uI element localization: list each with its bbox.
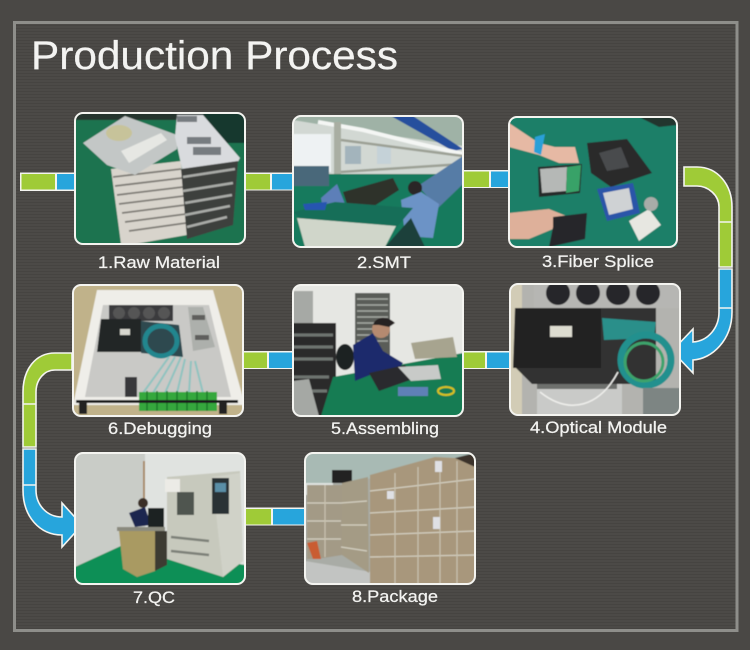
connector: step 6 to step 5 (243, 351, 293, 369)
photo: package (305, 453, 475, 584)
label: step 8: 8.Package (352, 588, 438, 606)
label: step 7: 7.QC (133, 589, 175, 607)
label: step 4: 4.Optical Module (530, 419, 667, 437)
photo: quality control (75, 453, 245, 584)
photo: assembling (293, 285, 463, 416)
connector: step 7 to step 8 (245, 508, 305, 526)
connector: start to step 1 (20, 172, 76, 191)
connector: step 1 to step 2 (245, 172, 293, 190)
label: step 1: 1.Raw Material (98, 254, 220, 272)
photo: fiber splice (509, 117, 677, 247)
photo: SMT line (293, 116, 463, 247)
arrow: step 3 to step 4 (672, 167, 732, 373)
connector: step 5 to step 4 (462, 351, 510, 369)
arrow: step 6 to step 7 (23, 353, 82, 547)
photo: debugging (73, 285, 245, 416)
connector: step 2 to step 3 (463, 170, 509, 188)
photo: optical module (510, 281, 680, 415)
photo: raw material (75, 113, 245, 244)
label: step 2: 2.SMT (357, 254, 411, 272)
label: step 5: 5.Assembling (331, 420, 439, 438)
label: step 3: 3.Fiber Splice (542, 253, 654, 271)
title: Production Process (31, 34, 398, 78)
label: step 6: 6.Debugging (108, 420, 212, 438)
